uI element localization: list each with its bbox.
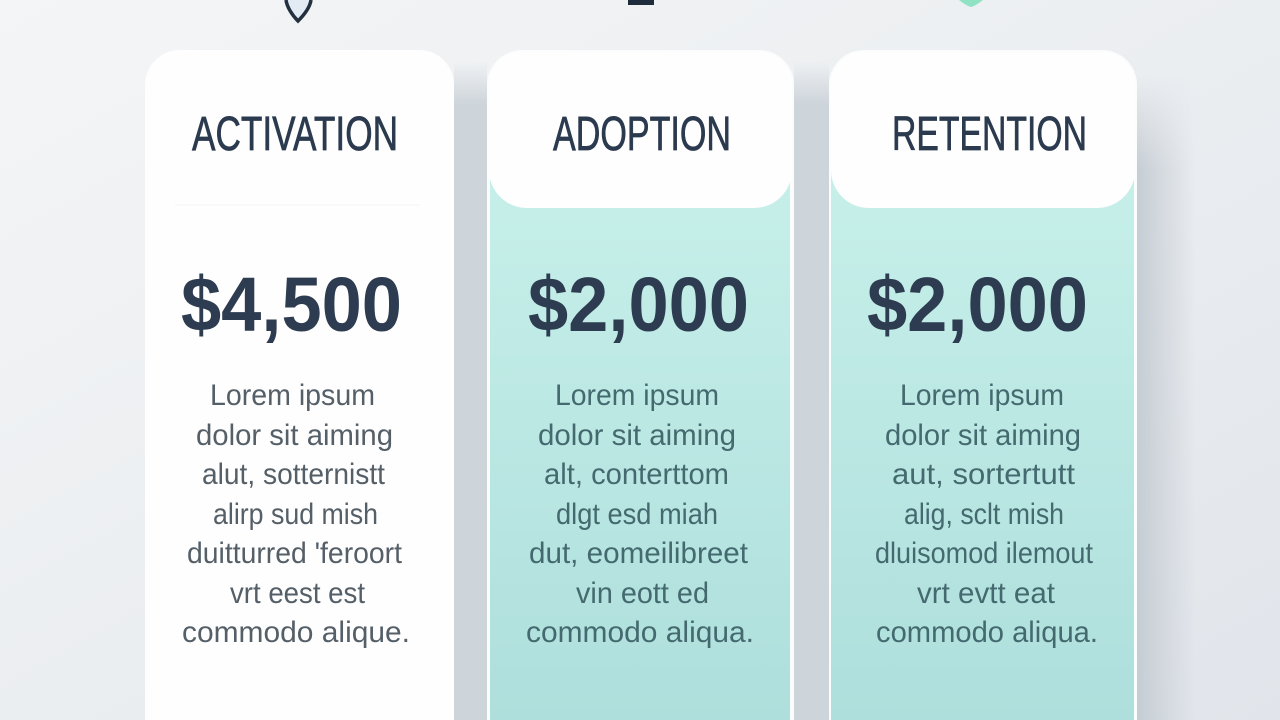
text block: activation: duitturred 'feroort <box>187 537 403 570</box>
heading: retention: RETENTION <box>892 108 1087 161</box>
header: adoption <box>489 52 792 208</box>
icon: shield tip <box>286 0 311 21</box>
text block: adoption: alt, conterttom <box>544 458 729 491</box>
text block: adoption: Lorem ipsum <box>555 379 719 412</box>
text block: activation: alirp sud mish <box>213 498 378 531</box>
text block: activation: commodo alique. <box>182 616 410 649</box>
text block: adoption: commodo aliqua. <box>526 616 754 649</box>
text block: retention: Lorem ipsum <box>900 379 1064 412</box>
price: retention: $2,000 <box>867 262 1088 348</box>
text block: activation <box>182 379 410 649</box>
text block: activation: Lorem ipsum <box>210 379 375 412</box>
text block: retention: commodo aliqua. <box>876 616 1098 649</box>
icon: dark block <box>628 0 654 5</box>
heading: adoption: ADOPTION <box>553 108 731 161</box>
text block: activation: vrt eest est <box>230 577 366 610</box>
panel: adoption <box>487 50 794 720</box>
text block: activation: dolor sit aiming <box>196 419 393 452</box>
text block: retention: alig, sclt mish <box>904 498 1064 531</box>
panel: retention <box>829 50 1137 720</box>
text block: retention: dolor sit aiming <box>885 419 1081 452</box>
heading: activation: ACTIVATION <box>192 108 398 161</box>
header: retention <box>831 52 1135 208</box>
text block: retention: dluisomod ilemout <box>875 537 1094 570</box>
text block: retention: aut, sortertutt <box>892 458 1076 491</box>
text block: retention: vrt evtt eat <box>917 577 1056 610</box>
icon: teal tip <box>959 0 983 7</box>
price: adoption: $2,000 <box>528 262 749 348</box>
text block: adoption <box>526 379 754 649</box>
text block: retention <box>875 379 1098 649</box>
panel: activation <box>145 50 454 720</box>
text block: adoption: dlgt esd miah <box>556 498 718 531</box>
text block: adoption: dolor sit aiming <box>538 419 736 452</box>
price: activation: $4,500 <box>181 262 402 348</box>
text block: activation: alut, sotternistt <box>202 458 386 491</box>
text block: adoption: vin eott ed <box>576 577 709 610</box>
text block: adoption: dut, eomeilibreet <box>529 537 749 570</box>
